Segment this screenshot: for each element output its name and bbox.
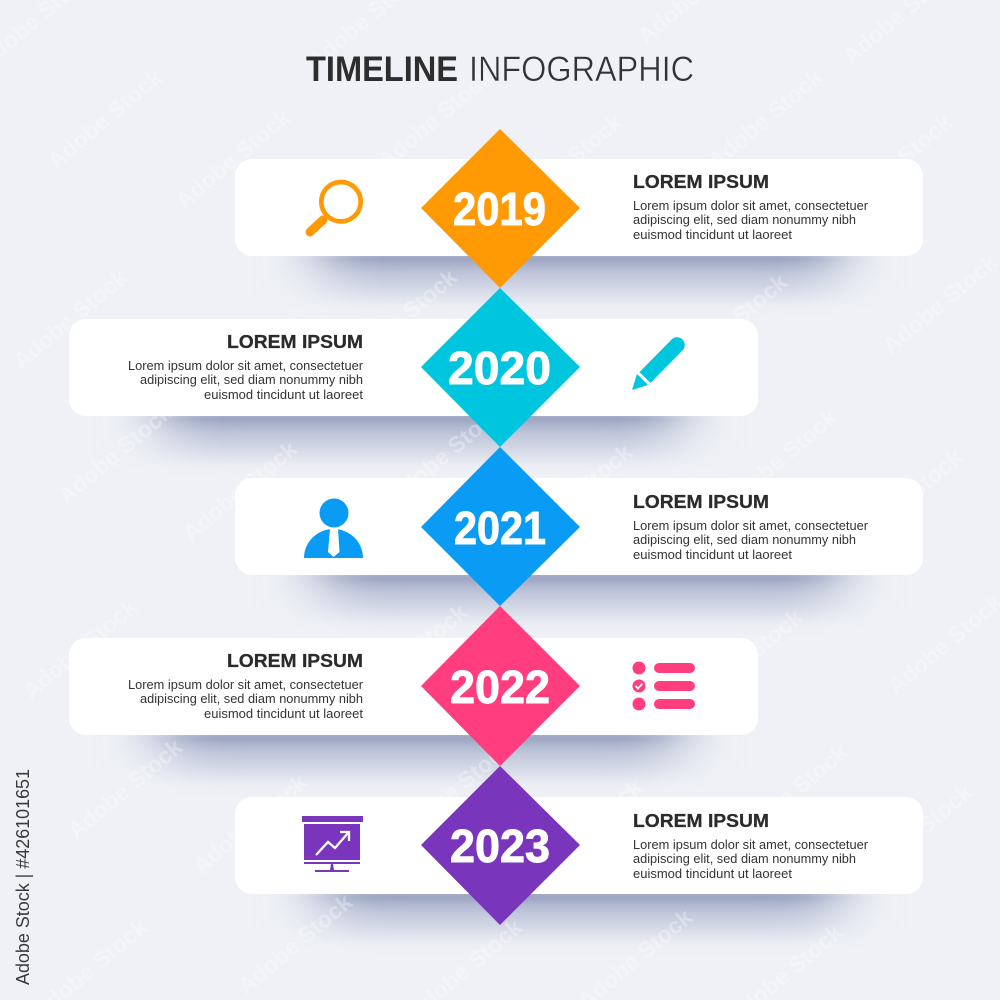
text block: 2019: Lorem ipsum dolor sit amet, consectetuer: [633, 199, 868, 213]
diamond: 2019: [421, 129, 580, 288]
icon: businessperson: [304, 498, 363, 558]
text block: 2022: adipiscing elit, sed diam nonummy nibh: [140, 692, 363, 706]
text block: 2020: adipiscing elit, sed diam nonummy nibh: [140, 373, 363, 387]
text block: 2020: Lorem ipsum dolor sit amet, consectetuer: [128, 359, 363, 373]
text block: 2023: [633, 811, 868, 881]
text block: 2023: Lorem ipsum dolor sit amet, consectetuer: [633, 838, 868, 852]
watermark pattern: Adobe Stock: [843, 444, 967, 554]
watermark pattern: Adobe Stock: [703, 64, 827, 174]
watermark pattern: Adobe Stock: [878, 249, 1000, 359]
text block: 2023: LOREM IPSUM: [633, 811, 769, 831]
watermark pattern: Adobe Stock: [233, 889, 357, 999]
text block: 2021: adipiscing elit, sed diam nonummy nibh: [633, 533, 856, 547]
text block: 2021: Lorem ipsum dolor sit amet, consectetuer: [633, 519, 868, 533]
text block: 2019: euismod tincidunt ut laoreet: [633, 228, 793, 242]
title: INFOGRAPHIC: [469, 50, 694, 89]
diamond: 2020: 2020: [448, 342, 551, 394]
watermark pattern: Adobe Stock: [53, 399, 177, 509]
title: TIMELINE: [306, 50, 458, 89]
diamond: 2019: 2019: [453, 183, 546, 235]
watermark pattern: Adobe Stock: [63, 734, 187, 844]
watermark pattern: Adobe Stock: [393, 734, 517, 844]
text block: 2021: euismod tincidunt ut laoreet: [633, 548, 793, 562]
watermark pattern: Adobe Stock: [728, 739, 852, 849]
watermark pattern: Adobe Stock: [513, 439, 637, 549]
text block: 2019: adipiscing elit, sed diam nonummy nibh: [633, 213, 856, 227]
watermark pattern: Adobe Stock: [373, 64, 497, 174]
watermark pattern: Adobe Stock: [178, 436, 302, 546]
watermark pattern: Adobe Stock: [668, 269, 792, 379]
panel: 2022 card: [69, 638, 758, 735]
text block: 2020: euismod tincidunt ut laoreet: [204, 388, 364, 402]
watermark pattern: Adobe Stock: [338, 264, 462, 374]
watermark pattern: Adobe Stock: [18, 594, 142, 704]
panel: 2020 card: [69, 319, 758, 416]
watermark pattern: Adobe Stock: [683, 604, 807, 714]
title: [306, 50, 694, 89]
text block: 2022: euismod tincidunt ut laoreet: [204, 707, 364, 721]
text block: 2019: LOREM IPSUM: [633, 172, 769, 192]
panel: 2019 card: [235, 159, 923, 256]
text block: 2023: adipiscing elit, sed diam nonummy nibh: [633, 852, 856, 866]
text block: 2023: euismod tincidunt ut laoreet: [633, 867, 793, 881]
watermark pattern: Adobe Stock: [8, 264, 132, 374]
panel: 2021 card: [235, 478, 923, 575]
text block: 2021: [633, 492, 868, 562]
text block: 2020: LOREM IPSUM: [227, 332, 363, 352]
watermark pattern: Adobe Stock: [523, 774, 647, 884]
text block: 2022: LOREM IPSUM: [227, 651, 363, 671]
text block: 2021: LOREM IPSUM: [633, 492, 769, 512]
text block: 2022: Lorem ipsum dolor sit amet, consectetuer: [128, 678, 363, 692]
diamond: 2022: [421, 606, 580, 766]
icon: pencil: [632, 337, 685, 390]
text block: 2022: [128, 651, 364, 721]
watermark pattern: Adobe Stock: [833, 109, 957, 219]
shadows beneath cards: [165, 254, 835, 944]
watermark pattern: Adobe Stock: [171, 104, 295, 214]
diamond: 2022: 2022: [450, 661, 550, 713]
icon: checklist: [632, 662, 695, 710]
watermark pattern: Adobe Stock: [853, 779, 977, 889]
icon: presentation board: [302, 816, 363, 872]
watermark pattern: Adobe Stock: [718, 404, 842, 514]
panel: 2023 card: [235, 797, 923, 894]
icon: magnifying glass: [310, 182, 361, 232]
text block: 2019: [633, 172, 868, 242]
watermark pattern: Adobe Stock: [383, 399, 507, 509]
watermark pattern: Adobe Stock: [503, 109, 627, 219]
stock credit vertical: Adobe Stock | #426101651: [13, 769, 33, 985]
watermark pattern: Adobe Stock: [43, 64, 167, 174]
diamond: 2021: [421, 447, 580, 606]
text block: 2020: [128, 332, 364, 402]
diamond: 2023: 2023: [450, 820, 550, 872]
watermark pattern: Adobe Stock: [188, 769, 312, 879]
diamond: 2023: [421, 766, 580, 925]
diamond: 2021: 2021: [454, 502, 546, 554]
watermark pattern: Adobe Stock: [348, 599, 472, 709]
diamond: 2020: [421, 288, 580, 447]
